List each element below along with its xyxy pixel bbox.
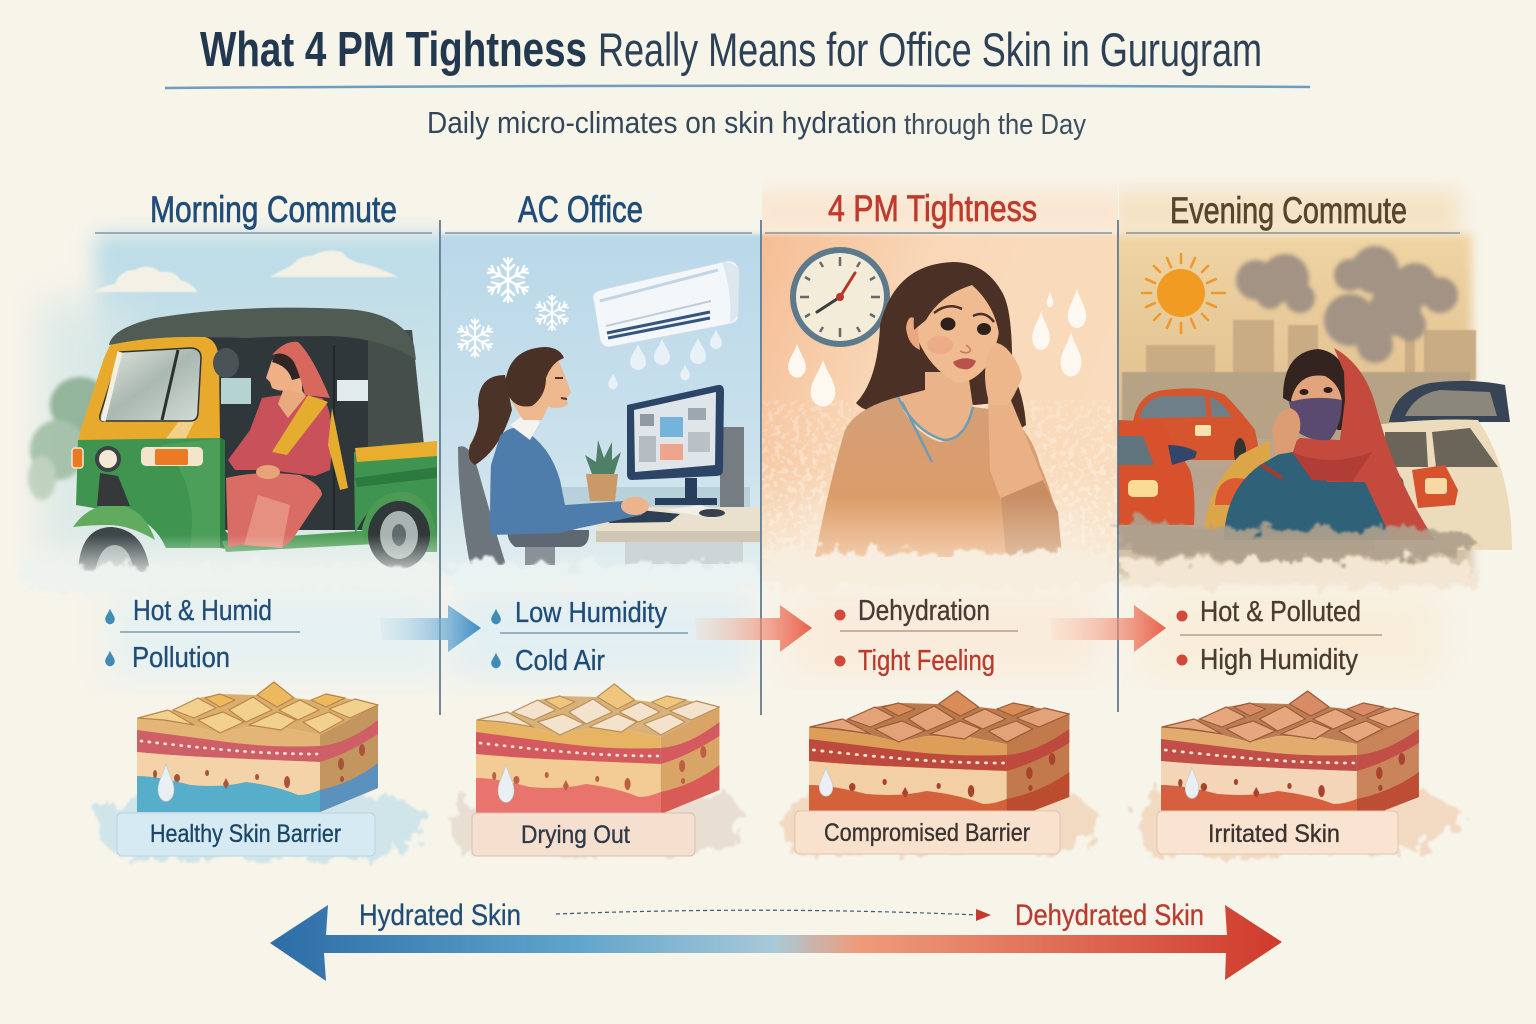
auto headlight <box>95 446 121 472</box>
label: hydrated skin: Hydrated Skin <box>359 899 521 932</box>
subtitle: Daily micro-climates on skin hydration <box>427 105 897 140</box>
illustration: orange car left <box>1118 420 1197 525</box>
heading: 4 PM tightness: 4 PM Tightness <box>828 188 1037 229</box>
title: Really Means for Office Skin in Gurugram <box>598 23 1262 76</box>
label: drying out <box>472 813 695 856</box>
eye and lips <box>555 378 567 399</box>
arrow: 4 PM to evening <box>1050 605 1166 652</box>
forehead <box>1291 376 1342 404</box>
mouse and paper <box>665 505 722 518</box>
list: evening conditions: High Humidity <box>1200 644 1358 676</box>
chair <box>458 446 506 565</box>
eyes <box>1300 387 1332 395</box>
panel: AC office background <box>430 234 775 680</box>
ear <box>906 317 920 350</box>
panel: morning commute background <box>40 234 455 680</box>
list: morning conditions <box>105 595 300 674</box>
sweater dissolve <box>800 495 1080 565</box>
bracelet <box>1262 465 1282 478</box>
texture: 4 PM lower edge <box>766 552 1114 588</box>
necklace <box>898 397 973 462</box>
sleeve <box>1001 480 1062 557</box>
mirror <box>213 348 239 378</box>
label: compromised barrier <box>795 811 1060 854</box>
keyboard <box>605 510 680 523</box>
illustration: masked woman <box>1224 348 1435 540</box>
arrow: dashed progression <box>556 909 991 921</box>
woman sari lower <box>226 473 322 548</box>
mask <box>1289 398 1342 440</box>
label: compromised barrier: Compromised Barrier <box>824 819 1030 847</box>
list: morning conditions: Hot & Humid <box>133 595 272 627</box>
far wall band <box>560 487 750 509</box>
label: irritated skin <box>1157 811 1398 854</box>
head <box>512 354 571 420</box>
icons: skin block water drops <box>158 764 1199 802</box>
auto rear panel <box>368 330 424 448</box>
illustration: street smog <box>1115 516 1475 562</box>
illustration: auto rickshaw <box>72 308 437 572</box>
list: 4 PM conditions: Tight Feeling <box>858 645 995 677</box>
illustration: orange car back <box>1132 388 1258 466</box>
texture: evening lower edge <box>1122 560 1471 586</box>
auto mudguard <box>73 505 155 540</box>
cheek blush <box>927 336 953 354</box>
wheel front <box>78 527 150 572</box>
heading: morning commute: Morning Commute <box>150 189 397 230</box>
subtitle: through the Day <box>904 109 1086 141</box>
title underline <box>165 86 1310 88</box>
auto cabin interior <box>205 335 424 530</box>
arrow: morning to office <box>380 605 481 652</box>
illustration: drops around tired woman <box>788 289 1086 407</box>
list: AC office conditions: Cold Air <box>515 645 605 677</box>
auto mudguard right <box>362 492 437 552</box>
illustration: office worker <box>458 347 649 565</box>
list: 4 PM conditions <box>834 595 1018 677</box>
illustration: smog clouds <box>1236 246 1458 363</box>
hand on cheek <box>985 343 1022 405</box>
woman face <box>266 356 302 394</box>
illustration: city skyline <box>1122 320 1476 440</box>
back hair <box>856 262 1026 430</box>
ponytail <box>469 375 512 465</box>
title: What 4 PM Tightness <box>200 23 587 77</box>
wheel rear <box>368 501 430 569</box>
woman scarf <box>272 342 330 398</box>
icon: snowflakes <box>456 258 569 357</box>
arrow: hydrated to dehydrated scale <box>270 905 1282 981</box>
list: AC office conditions <box>491 597 688 677</box>
monitor <box>627 385 724 505</box>
woman neck and chest <box>278 388 306 418</box>
torso <box>490 428 642 535</box>
illustration: road <box>1119 440 1469 550</box>
plant <box>585 440 621 501</box>
title <box>200 23 1262 77</box>
panel: 4 PM tightness background <box>750 190 1130 680</box>
illustration: clock <box>790 247 890 347</box>
front hair <box>914 266 1008 348</box>
panel: evening commute background <box>1100 190 1472 680</box>
skin block: compromised barrier <box>809 691 1069 821</box>
illustration: dark car right <box>1389 381 1510 422</box>
illustration: yellow and cream cars <box>1205 420 1512 550</box>
list: 4 PM conditions: Dehydration <box>858 595 990 627</box>
list: evening conditions <box>1176 596 1382 676</box>
auto rear body <box>354 441 437 540</box>
forearm <box>988 398 1045 500</box>
scarf <box>1288 348 1435 540</box>
hair <box>1283 349 1348 430</box>
label: healthy skin barrier: Healthy Skin Barrier <box>150 820 341 848</box>
auto indicator <box>141 447 203 466</box>
arrow: office to 4 PM <box>695 605 812 652</box>
woman torso <box>228 395 332 476</box>
auto canopy <box>109 308 416 360</box>
divider: panel separators <box>440 220 1118 715</box>
woman sash <box>272 395 348 490</box>
body <box>1224 445 1415 540</box>
woman hand <box>256 465 280 479</box>
skin block: drying out <box>476 684 719 814</box>
watercolor splash: skin bases <box>95 790 1465 858</box>
hair <box>505 347 564 407</box>
hand <box>621 497 649 515</box>
pc tower <box>720 427 744 509</box>
label: healthy skin barrier <box>117 813 375 856</box>
texture: morning lower fade <box>20 535 440 583</box>
illustration: AC wall unit <box>593 261 739 347</box>
auto yellow front <box>78 337 220 440</box>
desk cabinet <box>625 540 743 564</box>
illustration: tired woman <box>800 262 1080 565</box>
sweater <box>815 397 1062 557</box>
label: drying out: Drying Out <box>521 821 630 849</box>
skin block: irritated skin <box>1161 691 1419 821</box>
desk top <box>596 507 760 531</box>
illustration: woman in auto <box>226 342 348 548</box>
face <box>917 283 1000 382</box>
heading: AC office: AC Office <box>518 189 643 230</box>
texture: morning edge <box>24 566 440 590</box>
eyes <box>934 306 994 335</box>
auto grille <box>97 473 130 506</box>
illustration: clouds <box>93 251 398 292</box>
label: irritated skin: Irritated Skin <box>1208 820 1340 848</box>
nose and mouth <box>953 345 976 369</box>
auto windows <box>221 345 368 530</box>
auto green body <box>76 438 222 548</box>
woman hair <box>272 352 300 380</box>
illustration: tree <box>28 377 110 500</box>
illustration: sun <box>1142 254 1225 333</box>
auto windscreen <box>100 348 201 421</box>
list: AC office conditions: Low Humidity <box>515 597 667 629</box>
illustration: desk and computer <box>560 385 760 564</box>
hand <box>1272 408 1300 455</box>
heading: evening commute: Evening Commute <box>1170 190 1407 231</box>
list: evening conditions: Hot & Polluted <box>1200 596 1361 628</box>
auto side light <box>72 448 83 468</box>
illustration: water drops <box>608 330 722 389</box>
collar <box>510 412 540 440</box>
label: dehydrated skin: Dehydrated Skin <box>1015 899 1204 932</box>
auto floor <box>222 530 375 552</box>
texture: office lower edge <box>445 564 757 588</box>
neck <box>898 372 973 440</box>
skin block: healthy barrier <box>137 682 378 812</box>
list: morning conditions: Pollution <box>132 642 230 674</box>
